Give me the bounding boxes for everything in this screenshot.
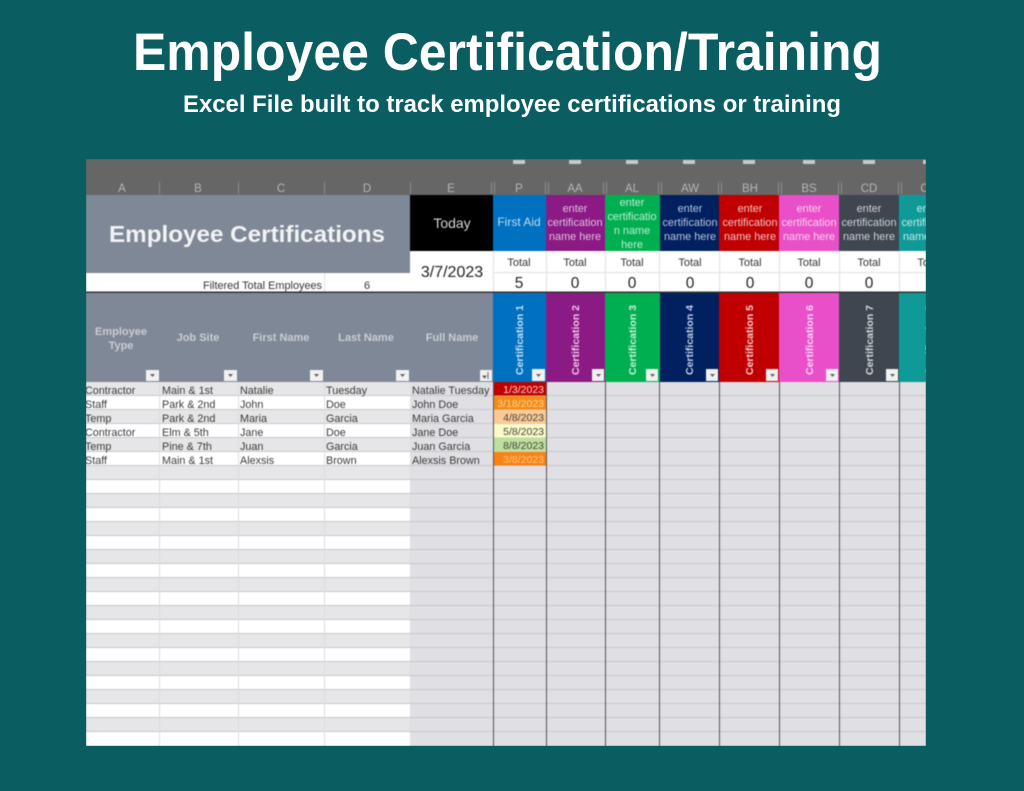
totals rows	[493, 251, 941, 292]
column letter bar: BH	[742, 183, 758, 195]
filtered total row: Filtered Total Employees	[203, 280, 323, 292]
certification name headers: n name	[614, 225, 650, 237]
employee column headers: Last Name	[338, 332, 394, 344]
sheet title block	[86, 195, 410, 274]
certification column headers: Certification 8	[924, 305, 936, 375]
certification column headers: Certification 4	[684, 305, 696, 375]
column letter bar	[86, 159, 938, 195]
employee rows: Alexsis Brown	[412, 455, 480, 467]
totals rows: 0	[628, 275, 637, 292]
certification name headers: name here	[664, 231, 716, 243]
employee column headers: Full Name	[426, 332, 478, 344]
today block	[410, 195, 493, 292]
certification dates: 5/8/2023	[503, 426, 544, 438]
column letter bar: CD	[861, 183, 877, 195]
certification name headers: name here	[549, 231, 601, 243]
filtered total row	[86, 273, 410, 292]
certification column headers: Certification 5	[744, 305, 756, 375]
employee rows: Tuesday	[326, 385, 368, 397]
certification name headers: enter	[563, 203, 588, 215]
data grid background	[86, 382, 926, 746]
filter buttons	[146, 369, 898, 381]
column letter bar: P	[515, 183, 523, 195]
employee rows: Staff	[85, 399, 108, 411]
totals rows: Total	[738, 257, 762, 269]
employee column headers: Type	[109, 340, 133, 352]
totals rows: Total	[678, 257, 702, 269]
employee rows: Elm & 5th	[162, 427, 209, 439]
certification dates: 1/3/2023	[503, 384, 544, 396]
employee rows	[85, 385, 490, 467]
certification name headers: name here	[783, 231, 835, 243]
totals rows: Total	[507, 257, 531, 269]
totals rows: Total	[563, 257, 587, 269]
totals rows: Total	[620, 257, 644, 269]
employee rows: Staff	[85, 455, 108, 467]
certification column headers: Certification 1	[514, 305, 526, 375]
employee rows: Contractor	[85, 385, 136, 397]
spreadsheet panel	[85, 159, 957, 746]
employee rows: Maria	[240, 413, 267, 425]
certification name headers: enter	[620, 197, 645, 209]
employee rows: Garcia	[326, 441, 358, 453]
title: Employee Certification/Training	[133, 23, 882, 82]
employee rows: Garcia	[326, 413, 358, 425]
certification name headers: First Aid	[497, 215, 541, 229]
employee rows: Park & 2nd	[162, 413, 215, 425]
employee rows: Juan Garcia	[412, 441, 470, 453]
subtitle: Excel File built to track employee certifications or training	[183, 91, 841, 118]
employee rows: Natalie	[240, 385, 274, 397]
filtered total row: 6	[364, 280, 370, 292]
certification dates: 3/8/2023	[503, 454, 544, 466]
employee rows: Pine & 7th	[162, 441, 212, 453]
employee rows: John Doe	[412, 399, 458, 411]
certification column headers: Certification 3	[627, 305, 639, 375]
employee column headers	[86, 292, 926, 382]
column letter bar: D	[363, 183, 371, 195]
employee rows: Jane	[240, 427, 263, 439]
employee rows: John	[240, 399, 263, 411]
totals rows: 0	[571, 275, 580, 292]
certification name headers: name here	[843, 231, 895, 243]
today block: Today	[433, 215, 471, 231]
certification dates: 8/8/2023	[503, 440, 544, 452]
employee column headers: First Name	[253, 332, 309, 344]
today block: 3/7/2023	[421, 264, 483, 281]
employee rows: Doe	[326, 427, 346, 439]
totals rows: 0	[746, 275, 755, 292]
employee rows: Temp	[85, 441, 111, 453]
certification column headers: Certification 2	[570, 305, 582, 375]
sheet title block: Employee Certifications	[109, 221, 385, 247]
employee rows: Natalie Tuesday	[412, 385, 490, 397]
totals rows: 0	[865, 275, 874, 292]
certification name headers: name here	[724, 231, 776, 243]
certification name headers: enter	[857, 203, 882, 215]
totals rows: 0	[805, 275, 814, 292]
totals rows: Total	[917, 257, 941, 269]
certification name headers: certification	[547, 217, 603, 229]
employee rows: Contractor	[85, 427, 136, 439]
totals rows: Total	[857, 257, 881, 269]
certification name headers: certification	[901, 217, 957, 229]
certification name headers: enter	[738, 203, 763, 215]
certification name headers: enter	[678, 203, 703, 215]
totals rows: Total	[797, 257, 821, 269]
employee column headers: Job Site	[177, 332, 219, 344]
column letter bar: AA	[567, 183, 583, 195]
certification name headers: name here	[903, 231, 955, 243]
certification name headers: enter	[797, 203, 822, 215]
certification dates: 3/18/2023	[497, 398, 544, 410]
certification column headers	[493, 293, 936, 382]
certification name headers: certification	[841, 217, 897, 229]
certification column headers: Certification 6	[804, 305, 816, 375]
certification name headers: certification	[662, 217, 718, 229]
employee rows: Maria Garcia	[412, 413, 474, 425]
employee rows: Temp	[85, 413, 111, 425]
column letter bar: CO	[920, 183, 938, 195]
employee rows: Park & 2nd	[162, 399, 215, 411]
certification column headers: Certification 7	[864, 305, 876, 375]
certification name headers: certification	[781, 217, 837, 229]
certification name headers	[493, 195, 957, 251]
column letter bar: AW	[681, 183, 699, 195]
certification dates	[494, 382, 546, 466]
certification dates: 4/8/2023	[503, 412, 544, 424]
employee rows: Main & 1st	[162, 385, 213, 397]
employee rows: Brown	[326, 455, 357, 467]
column letter bar: BS	[801, 183, 817, 195]
employee rows: Jane Doe	[412, 427, 458, 439]
column letter bar: B	[194, 183, 202, 195]
column letter bar: AL	[625, 183, 640, 195]
certification name headers: certificatio	[607, 211, 657, 223]
column letter bar: A	[118, 183, 126, 195]
employee column headers: Employee	[95, 326, 147, 338]
column letter bar: E	[447, 183, 455, 195]
certification name headers: enter	[917, 203, 942, 215]
totals rows: 0	[686, 275, 695, 292]
certification name headers: here	[621, 239, 643, 251]
column letter bar: C	[277, 183, 285, 195]
employee rows: Main & 1st	[162, 455, 213, 467]
certification name headers: certification	[722, 217, 778, 229]
employee rows: Alexsis	[240, 455, 275, 467]
totals rows: 5	[515, 275, 523, 292]
employee rows: Doe	[326, 399, 346, 411]
employee rows: Juan	[240, 441, 263, 453]
